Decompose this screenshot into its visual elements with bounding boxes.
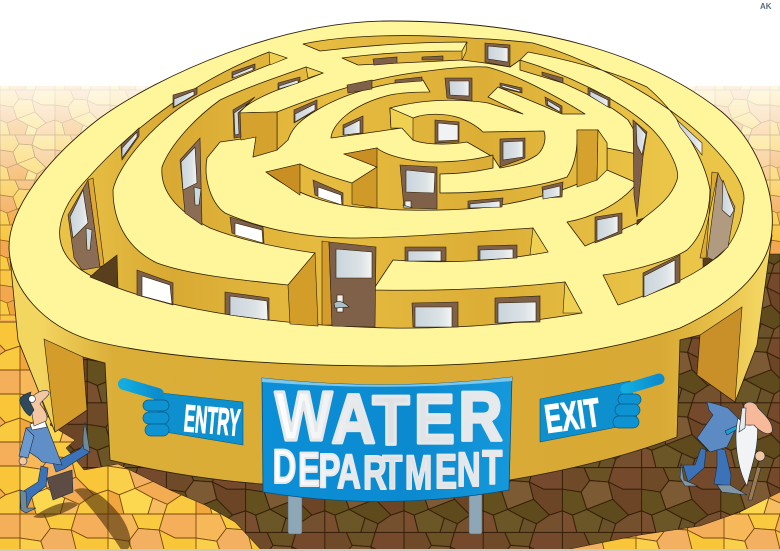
exit pointing hand sign [540, 379, 659, 443]
door: left inner [180, 138, 202, 225]
eye [29, 396, 35, 402]
collar [30, 421, 47, 430]
beard [736, 418, 758, 486]
hand [755, 451, 765, 461]
heading: WATER: WATER [275, 377, 502, 459]
raised shoe [83, 422, 90, 452]
heading: DEPARTMENT: DEPARTMENT [273, 440, 502, 500]
dark floor glimpses [90, 218, 713, 288]
exit curled fingers [613, 394, 641, 428]
door: large centre front [322, 241, 376, 327]
entry label: ENTRY [182, 397, 242, 445]
sign posts [288, 494, 482, 534]
bottom edge strip [0, 549, 780, 551]
sign top highlight [262, 377, 512, 387]
channel: centre lower [266, 130, 607, 210]
head [30, 390, 49, 426]
walker shadows on ground [33, 488, 130, 551]
hair [739, 408, 746, 432]
figure: old man exiting with cane [680, 402, 772, 500]
tie [725, 423, 743, 435]
door: inner centre [400, 165, 437, 209]
entry pointing hand sign [124, 384, 243, 445]
hand [19, 457, 27, 465]
front shoe [20, 490, 36, 513]
entry curled fingers [143, 400, 169, 436]
exit index finger [626, 379, 659, 389]
figure: young man entering with briefcase [19, 390, 90, 513]
maze outer wall [9, 235, 772, 484]
exit label: EXIT [542, 391, 603, 443]
channel: right cavity [520, 60, 678, 246]
door: core [435, 120, 459, 143]
hair [20, 392, 34, 416]
raised back leg [53, 444, 90, 472]
door: front row [225, 292, 269, 320]
maze top surface [9, 21, 772, 366]
main sign: water department [262, 377, 512, 502]
left gate inner face [44, 339, 87, 432]
jacket [26, 423, 62, 465]
maze channels [60, 36, 744, 328]
jacket [697, 402, 740, 452]
entry index finger [124, 384, 158, 394]
door: narrow top row [373, 57, 397, 65]
front leg [714, 448, 731, 486]
sleeve [19, 428, 34, 458]
door: left large [68, 178, 104, 270]
door: white windows [137, 270, 173, 305]
channel: outer left and bottom [60, 52, 582, 328]
channel: outer top and right [303, 36, 744, 305]
head [744, 402, 772, 434]
front shoe [717, 485, 747, 495]
right gate inner face [697, 307, 742, 402]
wall shadow on ground [50, 254, 780, 551]
back leg [683, 448, 706, 482]
front leg [20, 466, 48, 510]
channel: upper middle ring [277, 67, 585, 150]
door: right side [542, 72, 563, 83]
doors [68, 43, 735, 327]
briefcase [47, 470, 73, 500]
shaded wall faces [238, 42, 607, 326]
channel: inner core [390, 108, 545, 168]
cane [748, 467, 761, 500]
back shoe [680, 463, 698, 486]
artist signature: AK [760, 2, 772, 11]
